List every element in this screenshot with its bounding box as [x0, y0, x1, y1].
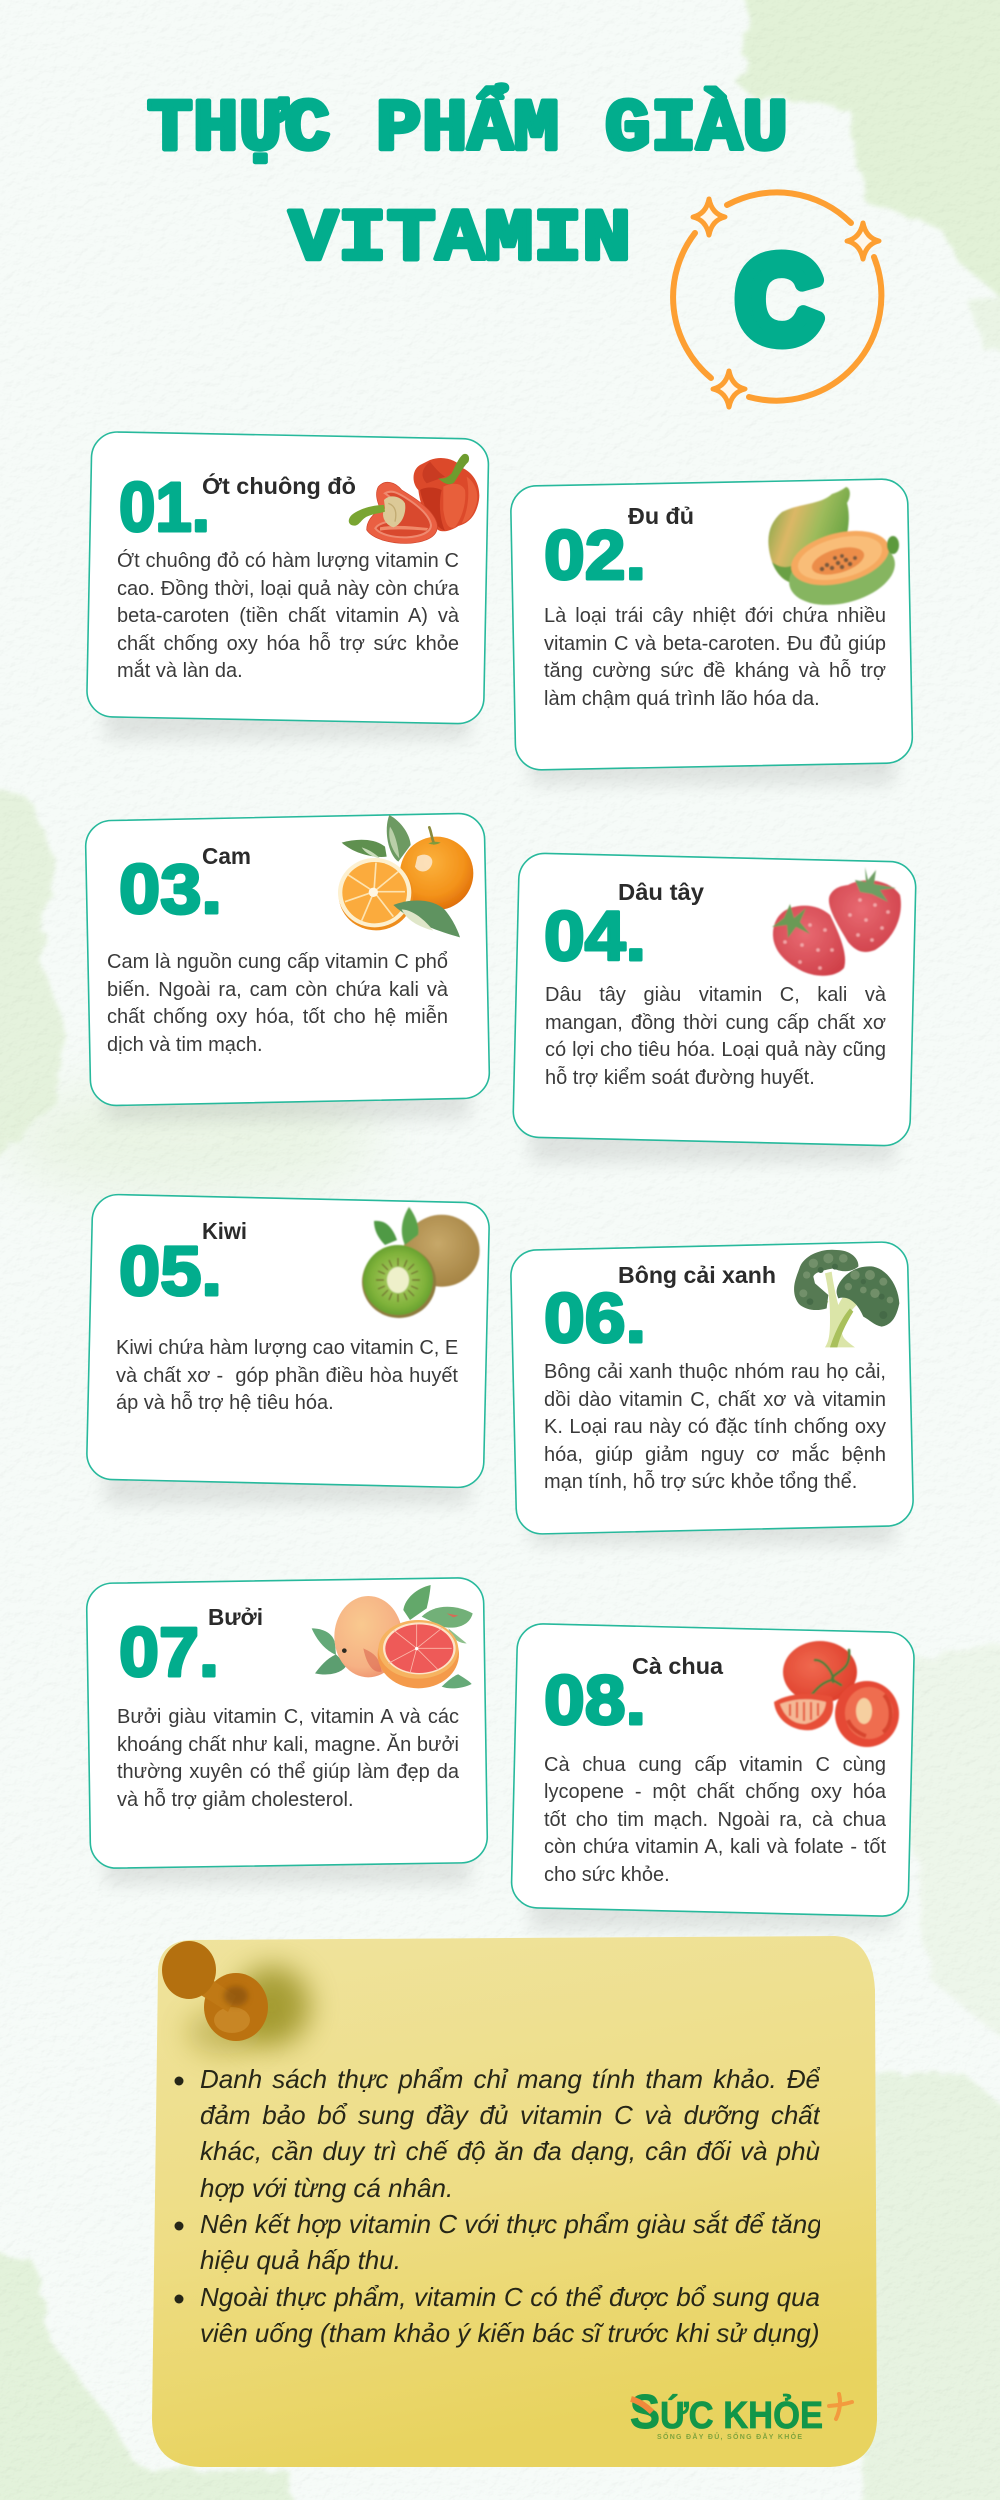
body text: Dâu tây giàu vitamin C, kali và — [545, 984, 886, 1006]
icon: tomato — [774, 1641, 899, 1747]
body text: hóa, giúp giảm nguy cơ mắc bệnh — [544, 1444, 886, 1466]
body text — [117, 548, 459, 693]
panel: card 01 red bell pepper — [87, 432, 489, 740]
logo: Sức Khỏe+ — [630, 2386, 852, 2441]
icon: papaya — [768, 487, 902, 615]
panel: card 05 kiwi — [86, 1194, 490, 1505]
bullet list: Danh sách thực phẩm chỉ mang tính tham khảo. Để — [200, 2064, 820, 2094]
body text — [545, 982, 886, 1100]
body text: chất chống oxy hóa, tốt cho hệ miễn — [107, 1006, 448, 1028]
icon: kiwi — [362, 1207, 480, 1318]
number 07: 07. — [119, 1613, 219, 1691]
body text — [544, 603, 886, 721]
title: VITAMIN — [289, 198, 631, 281]
body text: mạn tính, hỗ trợ sức khỏe tổng thể. — [544, 1471, 857, 1493]
panel: card 03 orange — [85, 813, 490, 1120]
body text: mắt và làn da. — [117, 660, 243, 682]
icon: vitamin C badge with sparkles: C — [737, 233, 821, 367]
icon: grapefruit — [312, 1585, 473, 1688]
body text: và chất xơ - góp phần điều hòa huyết — [116, 1365, 458, 1387]
body text: chất chống oxy hóa hỗ trợ sức khỏe — [117, 633, 459, 655]
number 04: 04. — [544, 897, 646, 975]
bullet list: Ngoài thực phẩm, vitamin C có thể được bổ sung qua — [200, 2282, 820, 2312]
body text: tăng cường sức đề kháng và hỗ trợ — [544, 660, 886, 682]
panel: card 04 strawberry — [513, 853, 916, 1163]
body text — [544, 1359, 886, 1504]
panel: card 08 tomato — [511, 1623, 915, 1930]
icon: orange — [338, 815, 473, 937]
body text: Bông cải xanh thuộc nhóm rau họ cải, — [544, 1361, 886, 1383]
heading: Kiwi — [202, 1218, 247, 1244]
title: THỰC PHẨM GIÀU — [147, 85, 788, 171]
heading: Cà chua — [632, 1653, 723, 1679]
number 08: 08. — [544, 1661, 646, 1739]
body text: beta-caroten (tiền chất vitamin A) và — [117, 605, 459, 627]
body text: Cam là nguồn cung cấp vitamin C phổ — [107, 951, 448, 973]
body text: thường xuyên có thể giúp làm đẹp da — [117, 1761, 459, 1783]
body text: dịch và tim mạch. — [107, 1034, 263, 1056]
body text: K. Loại rau này có đặc tính chống oxy — [544, 1416, 886, 1438]
body text: dồi dào vitamin C, chất xơ và vitamin — [544, 1389, 886, 1411]
number 01: 01. — [119, 468, 210, 546]
icon: vitamin C badge with sparkles — [673, 192, 881, 407]
bullet list: hiệu quả hấp thu. — [200, 2245, 401, 2275]
bullet list: viên uống (tham khảo ý kiến bác sĩ trước khi sử dụng). — [200, 2318, 820, 2348]
title — [147, 85, 788, 281]
body text: Kiwi chứa hàm lượng cao vitamin C, E — [116, 1337, 458, 1359]
bullet list — [174, 2061, 820, 2356]
logo: Sức Khỏe+: S — [630, 2386, 660, 2439]
body text: vitamin C và beta-caroten. Đu đủ giúp — [544, 633, 886, 655]
bullet list: hợp với từng cá nhân. — [200, 2173, 453, 2203]
body text — [107, 949, 448, 1067]
logo: Sức Khỏe+: SỐNG ĐẦY ĐỦ, SỐNG ĐẦY KHỎE — [657, 2431, 802, 2441]
bullet list: khác, cần duy trì chế độ ăn đa dạng, cân đối và phù — [200, 2136, 820, 2166]
body text: tốt cho tim mạch. Ngoài ra, cà chua — [544, 1809, 886, 1831]
heading: Bưởi — [208, 1604, 263, 1630]
body text: còn chứa vitamin A, kali và folate - tốt — [544, 1836, 886, 1858]
bullet list: Nên kết hợp vitamin C với thực phẩm giàu sắt để tăng — [200, 2209, 820, 2239]
panel: yellow sticky note — [152, 1936, 877, 2467]
body text: có lợi cho tiêu hóa. Loại quả này cũng — [545, 1039, 886, 1061]
panel: card 06 broccoli — [510, 1242, 914, 1545]
body text: cao. Đồng thời, loại quả này còn chứa — [117, 578, 459, 600]
body text: khoáng chất như kali, magne. Ăn bưởi — [117, 1734, 459, 1756]
panel: card 02 papaya — [510, 479, 913, 785]
body text: cho sức khỏe. — [544, 1864, 670, 1886]
body text: và hỗ trợ giảm cholesterol. — [117, 1789, 354, 1811]
body text: biến. Ngoài ra, cam còn chứa kali và — [107, 979, 448, 1001]
heading: Dâu tây — [618, 879, 704, 905]
body text: làm chậm quá trình lão hóa da. — [544, 688, 820, 710]
icon: bell pepper — [349, 454, 479, 543]
body text: hỗ trợ kiểm soát đường huyết. — [545, 1067, 815, 1089]
logo: Sức Khỏe+: ỨC KHỎE — [660, 2393, 823, 2437]
body text: áp và hỗ trợ hệ tiêu hóa. — [116, 1392, 334, 1414]
icon: push pin — [162, 1941, 310, 2054]
number 02: 02. — [544, 516, 646, 594]
number 03: 03. — [119, 850, 222, 928]
heading: Đu đủ — [628, 503, 694, 529]
icon: broccoli — [794, 1250, 899, 1347]
body text: lycopene - một chất chống oxy hóa — [544, 1781, 886, 1803]
body text — [117, 1704, 459, 1822]
heading: Bông cải xanh — [618, 1262, 776, 1288]
heading: Ớt chuông đỏ — [202, 472, 356, 499]
heading: Cam — [202, 843, 251, 869]
number 06: 06. — [544, 1279, 646, 1357]
panel: card 07 grapefruit — [86, 1578, 488, 1885]
body text: Là loại trái cây nhiệt đới chứa nhiều — [544, 605, 886, 627]
body text: Cà chua cung cấp vitamin C cùng — [544, 1754, 886, 1776]
body text: mangan, đồng thời cung cấp chất xơ — [545, 1012, 886, 1034]
number 05: 05. — [119, 1232, 222, 1310]
body text: Bưởi giàu vitamin C, vitamin A và các — [117, 1706, 459, 1728]
icon: strawberries — [772, 867, 901, 976]
body text: Ớt chuông đỏ có hàm lượng vitamin C — [117, 550, 459, 572]
body text — [116, 1335, 458, 1425]
body text — [544, 1752, 886, 1897]
bullet list: đảm bảo bổ sung đầy đủ vitamin C và dưỡng chất — [200, 2100, 820, 2130]
